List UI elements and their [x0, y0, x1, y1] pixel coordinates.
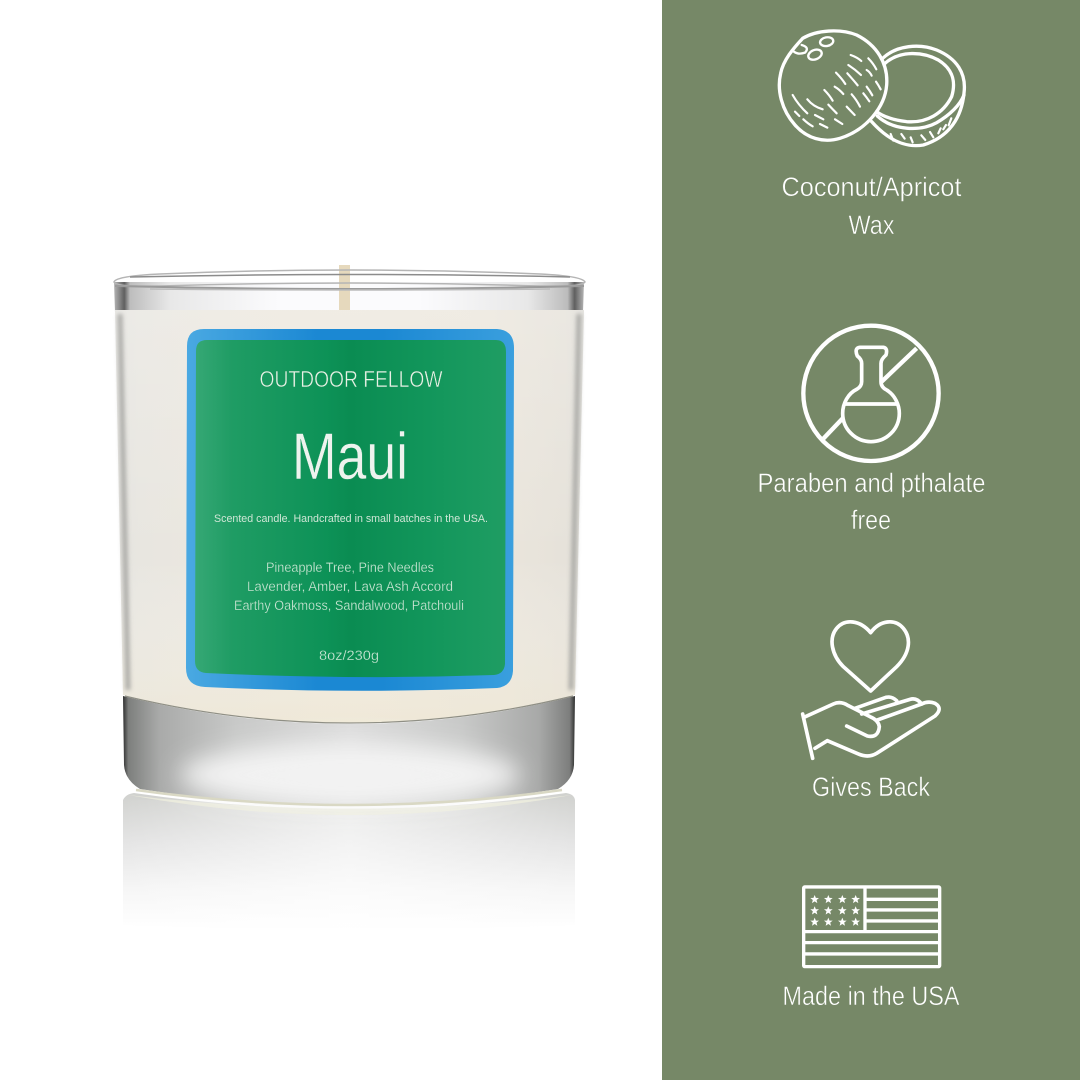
feature label: gives back: Gives Back [812, 772, 930, 802]
glass rim [114, 270, 585, 290]
feature label: paraben free: free [851, 505, 891, 535]
feature label: paraben free: Paraben and pthalate [758, 468, 986, 498]
candle jar [114, 265, 585, 807]
glass base [123, 696, 575, 806]
feature label: coconut apricot wax: Coconut/Apricot [782, 172, 962, 202]
feature label: coconut apricot wax: Wax [848, 210, 895, 240]
icon: heart in hand [803, 622, 939, 758]
scent notes: Earthy Oakmoss, Sandalwood, Patchouli [234, 598, 464, 613]
panel: features [662, 0, 1080, 1080]
background [0, 0, 662, 1080]
description: Scented candle. Handcrafted in small batches in the USA. [214, 513, 488, 525]
scent notes: Pineapple Tree, Pine Needles [266, 560, 434, 575]
feature label: made in the usa: Made in the USA [782, 981, 960, 1011]
glass upper section [114, 282, 584, 312]
reflection of candle [123, 793, 575, 930]
label face [195, 340, 506, 677]
wax body [115, 310, 584, 724]
icon: usa flag [804, 887, 940, 967]
candle name: Maui [292, 419, 408, 493]
wax edge shading [120, 314, 579, 690]
icon: coconut [779, 31, 964, 146]
weight: 8oz/230g [319, 648, 379, 663]
wick [339, 265, 350, 311]
product label [186, 329, 514, 691]
scent notes: Lavender, Amber, Lava Ash Accord [247, 579, 453, 594]
brand: OUTDOOR FELLOW [260, 366, 443, 392]
feature label: paraben free [758, 468, 986, 535]
feature label: coconut apricot wax [782, 172, 962, 240]
icon: no chemicals flask [803, 326, 939, 461]
scent notes [234, 560, 464, 613]
label border [186, 329, 514, 691]
